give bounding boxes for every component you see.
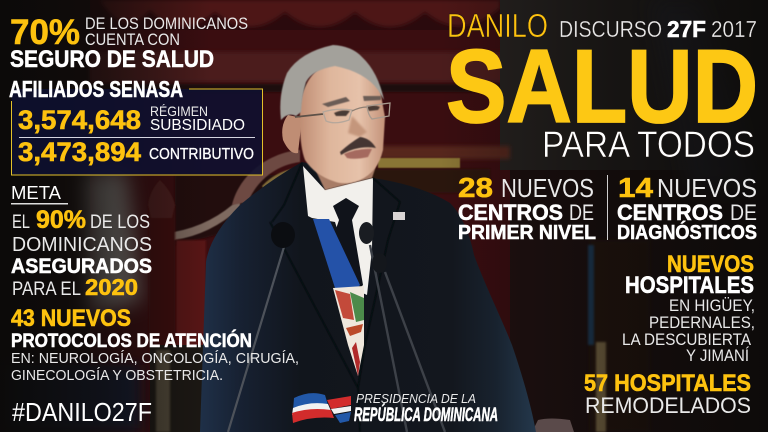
- tie: [333, 198, 363, 292]
- eyes: [334, 106, 380, 116]
- block: 43 nuevos protocolos: 43 NUEVOS: [11, 305, 131, 332]
- block: nuevos hospitales: NUEVOS: [667, 251, 754, 278]
- panel: afiliados senasa: [9, 76, 262, 175]
- mouth: [344, 149, 372, 159]
- block: meta 90%: PARA EL: [12, 279, 81, 300]
- stat: 70% seguro de salud: DE LOS DOMINICANOS: [85, 14, 248, 33]
- stat: 14 nuevos centros de diagnosticos: DE: [730, 200, 757, 225]
- block: nuevos hospitales: Y JIMANÍ: [686, 346, 749, 365]
- block: meta 90%: DE LOS: [90, 212, 150, 233]
- panel: afiliados senasa: 3,473,894: [18, 137, 141, 167]
- brows: [322, 96, 381, 107]
- stat: 14 nuevos centros de diagnosticos: CENTROS: [617, 200, 723, 225]
- logo: presidencia de la republica dominicana: PRESIDENCIA DE LA: [356, 391, 476, 406]
- header: danilo discurso 27f 2017: [447, 7, 757, 44]
- block: meta 90%: ASEGURADOS: [11, 255, 152, 278]
- microphone stand center: [370, 245, 407, 432]
- chair back left: [175, 175, 300, 245]
- block: nuevos hospitales: [622, 251, 755, 365]
- face: [300, 62, 385, 183]
- emblem: [333, 286, 364, 376]
- stat: 28 nuevos centros de primer nivel: DE: [569, 200, 594, 225]
- block: 43 nuevos protocolos: [11, 305, 299, 384]
- block: nuevos hospitales: PEDERNALES,: [649, 313, 755, 332]
- stat: 70% seguro de salud: SEGURO DE SALUD: [10, 46, 214, 73]
- stat: 14 nuevos centros de diagnosticos: 14: [618, 172, 653, 203]
- stat: 14 nuevos centros de diagnosticos: DIAGNÓSTICOS: [617, 220, 757, 244]
- stat: 70% seguro de salud: 70%: [10, 13, 80, 52]
- stat: 14 nuevos centros de diagnosticos: [617, 172, 757, 244]
- suit: [200, 162, 536, 432]
- stat: 28 nuevos centros de primer nivel: 28: [458, 172, 493, 203]
- header: danilo discurso 27f 2017: DISCURSO: [559, 16, 662, 42]
- stat: 28 nuevos centros de primer nivel: NUEVOS: [501, 173, 594, 203]
- photo: president at podium: [200, 45, 536, 432]
- stat: 14 nuevos centros de diagnosticos: NUEVOS: [657, 173, 757, 203]
- stat: 28 nuevos centros de primer nivel: [458, 172, 596, 244]
- block: meta 90%: 90%: [36, 206, 86, 234]
- panel: afiliados senasa: RÉGIMEN: [150, 103, 208, 119]
- panel: afiliados senasa: CONTRIBUTIVO: [149, 146, 254, 163]
- block: meta 90%: 2020: [85, 274, 138, 300]
- block: nuevos hospitales: LA DESCUBIERTA: [622, 330, 752, 349]
- glasses: [295, 103, 390, 123]
- block: meta 90%: EL: [12, 212, 30, 233]
- logo: presidencia de la republica dominicana: REPÚBLICA DOMINICANA: [354, 404, 498, 426]
- icon: dominican flag: [292, 393, 351, 423]
- microphone stand left: [228, 247, 284, 432]
- pale blurred figure: [85, 170, 140, 315]
- stat: 28 nuevos centros de primer nivel: CENTROS: [458, 200, 563, 225]
- block: 43 nuevos protocolos: PROTOCOLOS DE ATENCIÓN: [11, 330, 252, 352]
- hashtag: #DANILO27F: [12, 397, 152, 427]
- sash: [313, 219, 360, 294]
- panel: afiliados senasa: AFILIADOS SENASA: [9, 76, 183, 102]
- divider between centre stats: [607, 175, 608, 240]
- nose shadow: [348, 116, 367, 137]
- header: danilo discurso 27f 2017: DANILO: [447, 7, 548, 44]
- block: nuevos hospitales: EN HIGÜEY,: [669, 296, 755, 315]
- header: danilo discurso 27f 2017: 27F: [667, 16, 706, 42]
- header: danilo discurso 27f 2017: 2017: [711, 16, 757, 42]
- block: 43 nuevos protocolos: EN: NEUROLOGÍA, ONCOLOGÍA, CIRUGÍA,: [11, 350, 299, 367]
- hair: [280, 45, 384, 120]
- panel: afiliados senasa: SUBSIDIADO: [150, 117, 245, 134]
- stat: 70% seguro de salud: CUENTA CON: [85, 30, 180, 49]
- lapel pin: [393, 212, 405, 220]
- stat: 70% seguro de salud: [10, 13, 248, 73]
- ear: [282, 115, 302, 153]
- block: meta 90%: META: [11, 183, 61, 203]
- block: 57 hospitales remodelados: REMODELADOS: [585, 393, 751, 418]
- lapel seams: [270, 163, 400, 432]
- block: 43 nuevos protocolos: GINECOLOGÍA Y OBSTETRICIA.: [11, 367, 223, 384]
- block: 57 hospitales remodelados: [584, 370, 751, 418]
- logo: presidencia de la republica dominicana: [292, 391, 498, 426]
- moustache: [340, 137, 376, 155]
- wood post: [176, 240, 206, 355]
- neck: [306, 150, 378, 190]
- block: meta 90%: DOMINICANOS: [12, 234, 152, 256]
- shirt collar: [303, 166, 373, 295]
- block: 57 hospitales remodelados: 57 HOSPITALES: [584, 370, 751, 397]
- panel: afiliados senasa: 3,574,648: [18, 105, 141, 135]
- microphone stand right: [385, 272, 445, 432]
- block: meta 90%: [11, 183, 152, 300]
- stat: 28 nuevos centros de primer nivel: PRIMER NIVEL: [458, 222, 596, 244]
